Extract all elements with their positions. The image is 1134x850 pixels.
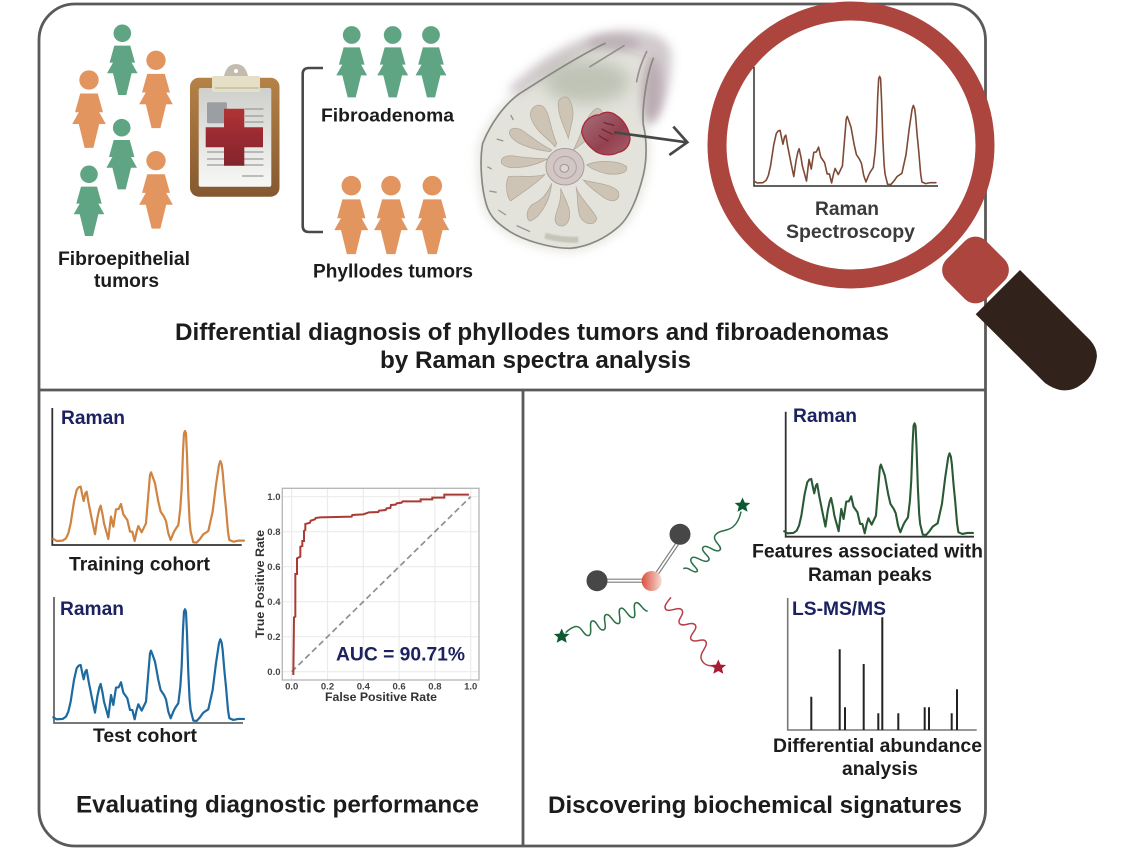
squiggle: red <box>665 597 713 666</box>
icon: mixed patients <box>72 24 173 236</box>
y axis label: True Positive Rate <box>253 530 267 638</box>
nipple <box>546 148 584 185</box>
icon: clipboard <box>190 64 280 197</box>
label: AUC: AUC = 90.71% <box>336 644 465 666</box>
label: training cohort: Training cohort <box>69 554 211 576</box>
chart: training cohort spectrum <box>52 408 244 545</box>
petals <box>501 97 627 226</box>
bracket <box>303 68 323 232</box>
heading: discovering biochemical signatures: Discovering biochemical signatures <box>548 792 962 819</box>
icon: star red <box>710 660 726 674</box>
x tick labels: 0.0 <box>285 682 298 692</box>
panel: patient cohort <box>58 24 473 292</box>
icon: phyllodes patients <box>334 176 449 254</box>
label: test cohort: Test cohort <box>93 726 198 747</box>
label: differential abundance: analysis <box>842 759 918 780</box>
label: LS-MS/MS: LS-MS/MS <box>792 599 886 620</box>
label: raman spectroscopy: Raman <box>815 199 879 220</box>
icon: fibroadenoma patients <box>336 26 446 97</box>
x axis label: False Positive Rate <box>325 690 437 704</box>
x tick labels: 0.4 <box>357 682 371 692</box>
squiggle: lower green <box>566 603 648 636</box>
y tick labels <box>267 492 281 678</box>
panel: evaluating diagnostic performance <box>52 408 479 818</box>
arrow <box>614 127 687 155</box>
icon: magnifying glass <box>717 11 1097 390</box>
label: raman spectroscopy: Spectroscopy <box>786 222 915 243</box>
outline <box>481 43 653 248</box>
chart: test cohort spectrum <box>53 597 244 723</box>
heading: evaluating diagnostic performance: Evaluating diagnostic performance <box>76 792 479 818</box>
y tick labels: 0.8 <box>267 527 280 538</box>
panel: discovering biochemical signatures <box>548 406 983 819</box>
tumor <box>582 112 630 155</box>
label: features: Features associated with <box>752 542 983 562</box>
x tick labels: 0.2 <box>321 682 334 692</box>
illustration: breast with tumor <box>481 30 687 248</box>
label: raman: Raman <box>61 408 125 429</box>
y tick labels: 0.6 <box>267 562 280 573</box>
label: raman: Raman <box>60 599 124 620</box>
squiggle: upper green <box>683 512 741 572</box>
x tick labels: 0.8 <box>428 682 442 692</box>
y tick labels: 0.4 <box>267 597 281 608</box>
label: fibroepithelial tumors: tumors <box>94 271 159 292</box>
y tick labels: 0.0 <box>267 667 280 678</box>
x tick labels <box>285 682 477 692</box>
icon: molecule with emission <box>554 498 750 674</box>
title: Differential diagnosis of phyllodes tumors and fibroadenomas <box>175 319 889 346</box>
chart: raman spectrum green <box>784 406 974 537</box>
label: raman: Raman <box>793 406 857 427</box>
title: by Raman spectra analysis <box>380 347 691 374</box>
icon: star lower left <box>554 628 570 643</box>
label: fibroadenoma: Fibroadenoma <box>321 104 455 126</box>
chart: ROC curve <box>253 488 479 704</box>
x tick labels: 1.0 <box>464 682 477 692</box>
label: differential abundance: Differential abundance <box>773 736 982 757</box>
label: phyllodes tumors: Phyllodes tumors <box>313 262 473 282</box>
x tick labels: 0.6 <box>392 682 406 692</box>
label: features: Raman peaks <box>808 565 932 586</box>
chart: raman spectrum in lens <box>754 67 938 186</box>
icon: star upper <box>735 498 750 512</box>
y tick labels: 1.0 <box>267 492 280 503</box>
label: fibroepithelial tumors: Fibroepithelial <box>58 249 190 270</box>
chart: mass spectrum bars <box>788 598 977 730</box>
y tick labels: 0.2 <box>267 632 280 643</box>
